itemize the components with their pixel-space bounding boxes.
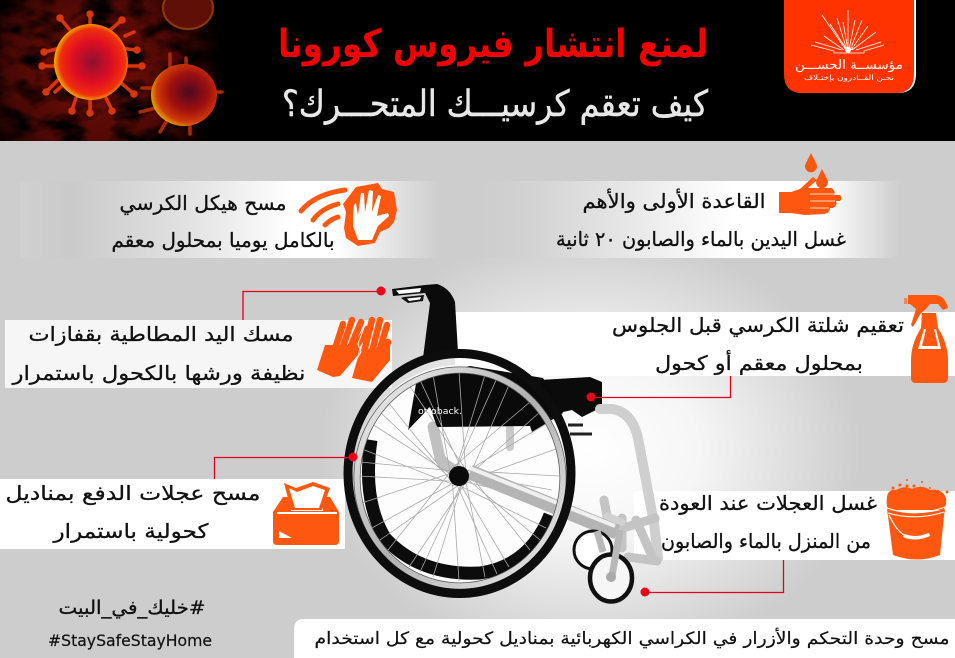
hashtag arabic: #خليك_في_البيت xyxy=(58,597,206,619)
logo center sun xyxy=(845,47,851,53)
logo xyxy=(784,0,916,93)
heading: cushion: تعقيم شلتة الكرسي قبل الجلوس xyxy=(612,313,904,338)
text: cushion: بمحلول معقم أو كحول xyxy=(655,350,863,375)
callout: handle xyxy=(243,286,386,320)
text: gloves: نظيفة ورشها بالكحول باستمرار xyxy=(11,361,306,385)
icon: gloves xyxy=(317,320,390,382)
wheel interior xyxy=(355,365,563,585)
heading: push wheels: مسح عجلات الدفع بمناديل xyxy=(6,481,260,505)
callout: caster xyxy=(640,560,784,596)
title: لمنع انتشار فيروس كورونا xyxy=(278,22,708,67)
panel: caster wheels xyxy=(634,479,955,560)
icon: tissue box xyxy=(273,482,339,545)
virus image xyxy=(0,0,225,141)
panel: wash hands xyxy=(480,153,900,258)
seat fabric xyxy=(408,366,563,432)
wheelchair xyxy=(48,284,784,650)
rear wheel xyxy=(348,354,617,594)
spokes xyxy=(359,371,559,581)
brand label: ottoback. xyxy=(418,407,462,417)
wheel hub xyxy=(449,466,469,486)
logo tagline: نحـن القــادرون بإختـلاف xyxy=(804,74,894,82)
heading: caster wheels: غسل العجلات عند العودة xyxy=(659,491,877,515)
main frame tube xyxy=(470,468,617,532)
hashtag english: #StaySafeStayHome xyxy=(48,631,212,650)
icon: wiping cloth xyxy=(301,183,397,246)
callout: cushion xyxy=(586,376,730,402)
logo name: مؤسســة الحســـن xyxy=(795,58,903,73)
heading: wipe frame: مسح هيكل الكرسي xyxy=(120,191,286,216)
icon: hand with drops xyxy=(779,153,842,215)
panel: push wheels xyxy=(0,479,345,549)
central light glow xyxy=(300,200,955,658)
logo sunburst xyxy=(811,10,884,53)
heading: gloves: مسك اليد المطاطية بقفازات xyxy=(28,322,294,346)
tire xyxy=(348,354,571,594)
text: controls note: مسح وحدة التحكم والأزرار في الكراسي الكهربائية بمناديل كحولية مع كل استخدام xyxy=(314,628,950,649)
panel: controls note xyxy=(294,619,955,658)
panel: cushion xyxy=(455,312,955,376)
icon: spray bottle xyxy=(904,295,948,383)
caster wheels xyxy=(574,530,632,602)
text: wipe frame: بالكامل يوميا بمحلول معقم xyxy=(112,228,334,252)
backrest and handle xyxy=(392,284,458,358)
text: push wheels: كحولية باستمرار xyxy=(52,519,209,543)
cushion brackets xyxy=(568,425,592,434)
icon: bucket xyxy=(887,479,948,560)
heading: wash hands: القاعدة الأولى والأهم xyxy=(582,189,766,213)
text: wash hands: غسل اليدين بالماء والصابون ٢٠ ثانية xyxy=(556,227,846,251)
text: caster wheels: من المنزل بالماء والصابون xyxy=(661,529,871,553)
panel: wipe chair frame xyxy=(20,181,440,258)
inner black rim xyxy=(368,440,550,573)
seat cushion xyxy=(535,377,602,425)
subtitle: كيف تعقم كرسيـــك المتحـــرك؟ xyxy=(282,84,709,125)
frame tubes xyxy=(433,409,658,561)
panel: gloves xyxy=(5,320,392,388)
callout: push wheel xyxy=(214,452,358,479)
push rim xyxy=(357,370,563,586)
header band xyxy=(0,0,955,141)
